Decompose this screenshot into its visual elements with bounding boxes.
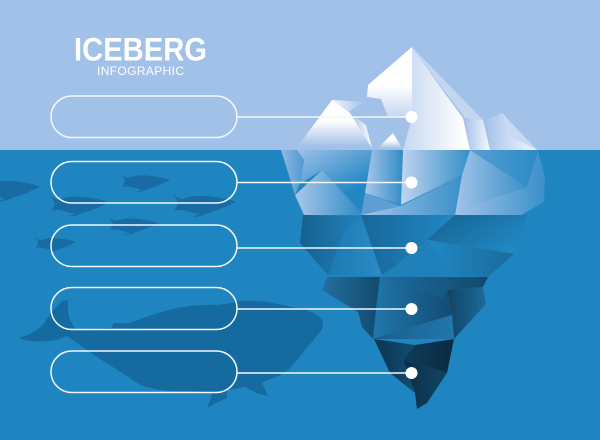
dot 3 [406, 242, 418, 254]
facet: inner left [328, 216, 381, 275]
facet: centre left [365, 150, 403, 205]
facet: main right face [403, 47, 470, 150]
penguin far left [0, 179, 40, 202]
penguin top [121, 174, 170, 192]
facet: lower [373, 315, 454, 339]
facet: main left face [367, 47, 412, 117]
facet: right [403, 339, 454, 373]
connector 4 [237, 308, 411, 310]
connector dots [406, 111, 418, 379]
facet: right lower [427, 240, 514, 277]
facet: upper strip [332, 100, 365, 112]
connectors [237, 117, 411, 373]
pill 5 [51, 351, 237, 392]
facet: small peak right [350, 113, 372, 148]
facet: top right [380, 277, 488, 298]
facet: right top [427, 215, 527, 254]
facet: left [374, 339, 415, 393]
facet: left [300, 215, 361, 275]
facet: right [447, 287, 486, 339]
penguin middle left [50, 195, 109, 217]
facet: lower left [295, 170, 361, 215]
submerged darkest tip [374, 339, 415, 393]
pill 3 [51, 225, 237, 266]
connector 3 [237, 247, 411, 249]
facet: centre lower [381, 240, 455, 277]
connector 1 [237, 116, 411, 118]
heading: iceberg: ICEBERG [74, 32, 207, 68]
pill 2 [51, 162, 237, 203]
sea background [0, 150, 600, 440]
connector 2 [237, 182, 411, 184]
iceberg [281, 47, 545, 409]
pill 4 [51, 288, 237, 330]
penguin centre [109, 217, 158, 235]
whale silhouette [19, 300, 323, 408]
penguin middle right [173, 194, 236, 217]
facet: right shoulder [465, 118, 490, 150]
dot 2 [406, 176, 418, 188]
submerged light band [281, 150, 304, 195]
submerged dark band [322, 277, 380, 339]
facet: left [322, 277, 380, 339]
iceberg tip above water [412, 47, 483, 120]
subheading: infographic: INFOGRAPHIC [97, 64, 184, 78]
dot 1 [406, 111, 418, 123]
facet: centre lower [361, 193, 401, 215]
facet: right top [470, 150, 538, 187]
label pills [51, 96, 237, 392]
facet: centre bottom [361, 175, 462, 215]
facet: right peak [487, 113, 537, 150]
facet: left body [297, 150, 372, 212]
facet: centre [361, 215, 455, 275]
facet: left edge [281, 150, 304, 195]
pill 1 [51, 96, 237, 138]
facet: back ridge [412, 47, 483, 120]
dot 5 [406, 367, 418, 379]
penguin small [35, 237, 76, 252]
penguin silhouettes [0, 174, 236, 252]
facet: centre [401, 150, 470, 205]
connector 5 [237, 372, 411, 374]
facet: right peak inner [502, 113, 537, 150]
dot 4 [406, 303, 418, 315]
facet: far right [455, 150, 545, 215]
facet: centre [373, 277, 452, 339]
sky background [0, 0, 600, 150]
facet: right [455, 150, 527, 215]
facet: small ridge [376, 133, 403, 150]
facet: bottom [403, 360, 447, 409]
title [74, 32, 207, 78]
facet: small peak left [295, 100, 372, 150]
submerged blue band [300, 215, 361, 275]
